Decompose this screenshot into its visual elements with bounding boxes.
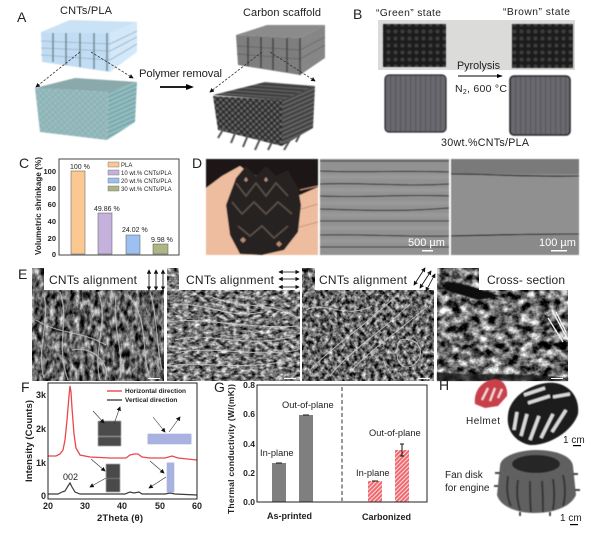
inset: vertical sample photo	[106, 464, 120, 492]
bar: PLA	[71, 171, 85, 254]
caption box 4	[479, 268, 568, 290]
brown state heading: “Brown” state	[503, 7, 570, 18]
scale: 100 µm: 100 µm	[539, 237, 576, 249]
teal composite block	[35, 78, 137, 140]
polymer removal label: Polymer removal	[139, 68, 222, 80]
caption box 1	[44, 268, 164, 290]
label G: G	[214, 379, 225, 395]
label A: A	[17, 9, 27, 25]
panel D: printed lattice and SEM	[192, 155, 579, 255]
002 peak label: 002	[63, 472, 78, 482]
alignment arrows horizontal	[279, 272, 299, 287]
scale: 500 µm: 500 µm	[408, 237, 445, 249]
caption box 3: CNTs alignment	[319, 273, 408, 287]
bar labels: In-plane	[260, 448, 294, 458]
label C: C	[19, 155, 29, 171]
dashed zoom arrows left	[36, 52, 133, 87]
bar: as-printed out-of-plane	[299, 415, 313, 502]
panel G: thermal conductivity chart	[214, 379, 427, 522]
y tick labels: 0.0	[243, 497, 255, 507]
SEM 4	[437, 268, 568, 381]
bar: 30 wt%	[153, 244, 168, 254]
photo strip background	[378, 20, 575, 70]
material caption: 30wt.%CNTs/PLA	[441, 137, 530, 149]
tick labels: 100	[43, 167, 56, 176]
group labels	[267, 511, 411, 522]
legend	[108, 162, 172, 193]
label E: E	[18, 266, 27, 282]
brown top view	[510, 76, 570, 135]
bar labels: Out-of-plane	[369, 428, 421, 438]
y tick labels: 0.6	[243, 409, 255, 419]
y tick labels: 0	[41, 491, 46, 501]
legend: Horizontal direction	[125, 388, 186, 395]
separator	[341, 387, 343, 501]
tick labels: 20	[48, 234, 56, 243]
legend: PLA	[121, 163, 132, 169]
tick labels: 80	[48, 184, 56, 193]
inset arrows top	[93, 407, 180, 432]
legend	[107, 388, 186, 404]
grey carbon block	[236, 25, 325, 75]
axes frame	[48, 383, 197, 499]
black helmet	[508, 383, 578, 445]
bar labels: In-plane	[356, 468, 390, 478]
N2 condition: 2	[463, 89, 467, 96]
y tick labels: 0.2	[243, 468, 255, 478]
process arrow	[160, 84, 194, 90]
photo: lattice on hand	[206, 159, 318, 255]
brown side view	[512, 24, 573, 68]
SEM 1	[32, 268, 164, 381]
green top view	[385, 75, 446, 132]
label F: F	[21, 379, 30, 395]
green side view	[383, 24, 446, 67]
axes frame	[59, 159, 179, 255]
bar labels	[260, 400, 421, 478]
dashed zoom arrows right	[210, 52, 315, 92]
bar labels: Out-of-plane	[282, 400, 334, 410]
helmet label: Helmet	[466, 416, 500, 427]
y tick labels: 2k	[36, 424, 47, 434]
caption box 1: CNTs alignment	[49, 273, 138, 287]
value labels: 9.98 %	[151, 237, 173, 244]
y tick labels	[243, 380, 255, 507]
inset: horizontal sample photo	[98, 421, 121, 446]
y tick labels: 1k	[36, 458, 47, 468]
fan disk	[494, 450, 580, 516]
legend: 10 wt.% CNTs/PLA	[121, 171, 172, 177]
SEM 3	[302, 268, 434, 381]
inset: horizontal fibre schematic	[148, 434, 191, 444]
legend: 30 wt.% CNTs/PLA	[121, 187, 172, 193]
value labels: 49.86 %	[94, 206, 120, 213]
fan disk label: for engine	[445, 483, 490, 494]
SEM 2	[167, 268, 300, 381]
caption box 2: CNTs alignment	[186, 273, 275, 287]
value labels: 100 %	[70, 164, 90, 171]
panel F: XRD chart	[21, 379, 202, 524]
fan disk label: Fan disk	[445, 470, 484, 481]
bar: carbonized in-plane	[368, 481, 382, 502]
green state heading: “Green” state	[376, 8, 441, 19]
horizontal direction curve	[48, 386, 197, 460]
caption box 3	[315, 268, 434, 290]
panel A: polymer removal schematic	[17, 5, 325, 150]
x tick labels: 40	[117, 501, 127, 511]
y tick labels: 0.8	[243, 380, 255, 390]
bar: 20 wt%	[126, 235, 140, 254]
label H: H	[439, 377, 449, 393]
y tick labels: 3k	[36, 390, 47, 400]
axes frame	[257, 385, 427, 502]
bar: as-printed in-plane	[272, 463, 286, 502]
SEM image: filament 100 µm	[451, 159, 579, 255]
label D: D	[192, 155, 202, 171]
N2 condition: N	[455, 83, 463, 95]
x tick labels: 20	[43, 501, 53, 511]
panel E: SEM alignment images	[18, 266, 568, 381]
legend: Vertical direction	[125, 397, 177, 404]
bar: carbonized out-of-plane	[395, 450, 409, 502]
tick labels: 40	[48, 217, 56, 226]
x tick labels	[43, 501, 202, 511]
heading: Carbon scaffold: Carbon scaffold	[243, 7, 321, 19]
panel H: printed objects	[439, 377, 585, 525]
inset arrows bottom	[90, 459, 166, 488]
label B: B	[353, 6, 362, 22]
dark carbon rods	[213, 82, 315, 150]
x axis title: 2Theta (θ)	[97, 513, 143, 524]
group labels: As-printed	[267, 511, 312, 521]
heading: CNTs/PLA: CNTs/PLA	[60, 5, 113, 17]
tick labels: 0	[52, 250, 56, 259]
N2 condition: , 600 °C	[467, 83, 507, 95]
scale bars	[148, 378, 563, 379]
caption box 4: Cross- section	[487, 273, 565, 287]
legend: 20 wt.% CNTs/PLA	[121, 179, 172, 185]
panel B: pyrolysis photographs	[353, 6, 575, 149]
value labels	[70, 164, 173, 244]
y axis title: Volumetric shrinkage (%)	[34, 157, 43, 255]
blue printed block	[41, 20, 137, 72]
tick labels	[43, 167, 56, 259]
red helmet	[475, 379, 507, 408]
SEM image: filaments 500 µm	[320, 159, 449, 255]
vertical direction curve	[48, 483, 197, 495]
caption box 2	[179, 268, 300, 290]
helmet scale: 1 cm	[563, 435, 585, 446]
fan disk scale: 1 cm	[560, 513, 582, 524]
pyrolysis label: Pyrolysis	[457, 60, 501, 72]
inset: vertical fibre schematic	[167, 463, 174, 492]
alignment arrows vertical	[149, 270, 163, 290]
panel C: volumetric shrinkage chart	[19, 155, 179, 259]
y axis title: Intensity (Counts)	[24, 400, 35, 482]
value labels: 24.02 %	[122, 227, 148, 234]
group labels: Carbonized	[362, 512, 411, 522]
pyrolysis arrow	[458, 74, 503, 78]
x tick labels: 50	[155, 501, 165, 511]
bar: 10 wt%	[98, 213, 112, 254]
tick labels: 60	[48, 200, 56, 209]
y axis title: Thermal conductivity (W/(mK))	[226, 384, 236, 514]
x tick labels: 30	[80, 501, 90, 511]
error bars	[276, 415, 404, 481]
x tick labels: 60	[192, 501, 202, 511]
y tick labels	[36, 390, 47, 501]
alignment arrows diagonal	[414, 268, 435, 291]
y tick labels: 0.4	[243, 439, 255, 449]
fan disk label	[445, 470, 490, 494]
